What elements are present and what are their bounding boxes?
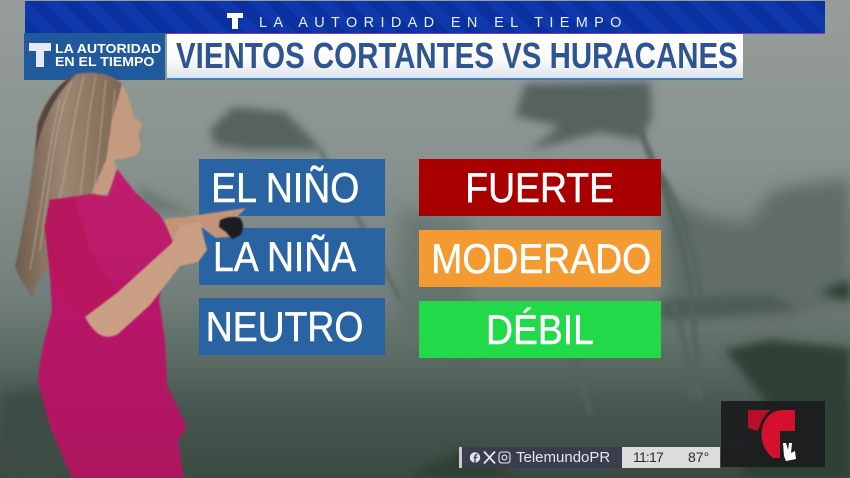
- time and temperature: [622, 447, 720, 468]
- title: VIENTOS CORTANTES VS HURACANES: [176, 35, 738, 76]
- social icons: [470, 450, 511, 464]
- label: La Niña: LA NIÑA: [213, 233, 357, 280]
- presenter sleeve: [45, 198, 117, 317]
- brand text: EN EL TIEMPO: [55, 54, 154, 68]
- presenter front arm and fist: [85, 222, 207, 337]
- presenter back arm and pointing hand: [164, 208, 246, 240]
- top banner: [25, 1, 825, 34]
- presenter hair: [15, 73, 123, 298]
- label: Fuerte: [419, 159, 661, 216]
- label: Fuerte: FUERTE: [466, 164, 614, 211]
- banner logo: [227, 13, 243, 29]
- brand box: [24, 33, 165, 80]
- presenter clicker: [219, 217, 243, 239]
- social bar: [459, 447, 622, 468]
- label: Débil: [419, 301, 661, 358]
- label: El Niño: [199, 159, 385, 216]
- label: La Niña: [199, 228, 385, 285]
- label: Neutro: NEUTRO: [206, 303, 364, 350]
- presenter face and neck: [92, 84, 143, 198]
- logo: peace hand: [783, 443, 796, 461]
- social handle: TelemundoPR: [516, 449, 610, 466]
- label: Neutro: [199, 298, 385, 355]
- brand text: LA AUTORIDAD: [55, 42, 161, 56]
- brand text: [55, 42, 161, 68]
- Telemundo logo box: [721, 401, 825, 467]
- title bar: [167, 34, 743, 80]
- label: El Niño: EL NIÑO: [211, 164, 359, 211]
- label: Débil: DÉBIL: [486, 306, 594, 353]
- brand logo: [29, 43, 51, 67]
- logo: T: [748, 410, 795, 458]
- temperature: 87°: [688, 449, 709, 465]
- presenter dress: [38, 169, 187, 478]
- label: Moderado: MODERADO: [431, 235, 651, 282]
- banner text: LA AUTORIDAD EN EL TIEMPO: [259, 15, 628, 31]
- time: 11:17: [633, 449, 663, 465]
